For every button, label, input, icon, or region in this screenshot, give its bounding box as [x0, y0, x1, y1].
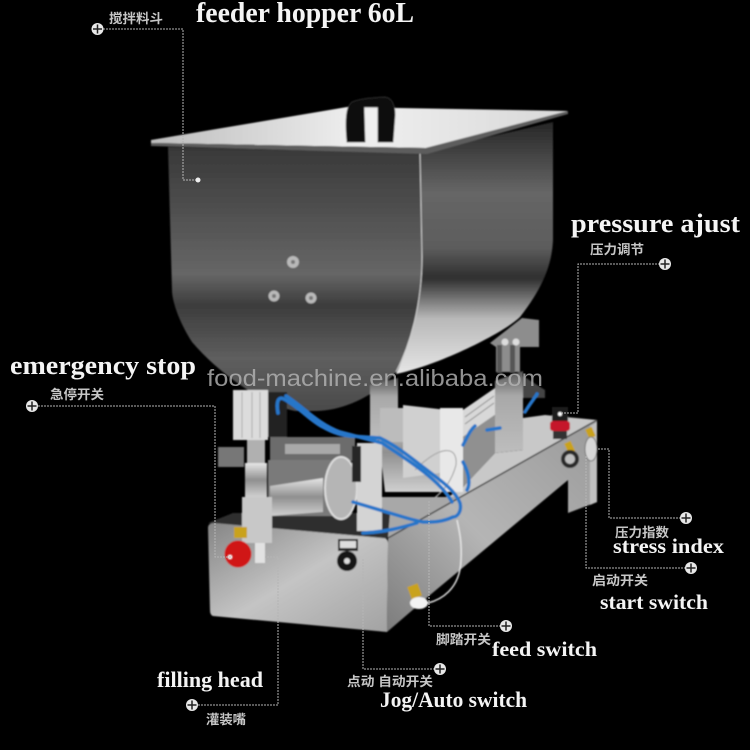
callout: jog auto switch: 点动 自动开关	[347, 674, 433, 689]
tray interior	[208, 415, 597, 538]
hopper bracket	[490, 318, 539, 373]
valve body	[268, 437, 382, 531]
callout: feed switch	[429, 500, 597, 661]
callout: jog auto switch: Jog/Auto switch	[380, 687, 527, 712]
side labels and switches	[561, 427, 597, 468]
callout: start switch: 启动开关	[592, 573, 648, 588]
callout: feed switch: 脚踏开关	[436, 632, 491, 647]
callout: pressure adjust: pressure ajust	[571, 209, 740, 238]
callout: feed switch: feed switch	[492, 637, 597, 661]
callout: feeder hopper	[92, 0, 414, 182]
hopper side face	[396, 122, 553, 374]
callout: start switch: start switch	[600, 590, 708, 614]
hopper lid handle	[346, 97, 395, 142]
hopper bolts	[268, 256, 316, 304]
callout: pressure adjust	[562, 209, 740, 413]
emergency stop button	[224, 540, 252, 568]
callout: start switch	[586, 455, 708, 614]
support plate right	[495, 371, 545, 453]
watermark: food-machine.en.alibaba.com	[207, 365, 543, 391]
blue air tubes	[277, 394, 537, 533]
callout: pressure adjust: 压力调节	[590, 242, 644, 257]
hopper front face	[168, 147, 422, 411]
callout: emergency stop: emergency stop	[10, 351, 196, 380]
callout: jog auto switch	[347, 558, 527, 712]
filling head	[218, 390, 287, 563]
support plate left	[370, 378, 398, 440]
callout: emergency stop	[10, 351, 231, 557]
front panel and base rail	[208, 420, 597, 632]
callout: stress index: stress index	[613, 534, 725, 558]
callout: emergency stop: 急停开关	[50, 387, 104, 402]
jog auto selector switch	[337, 539, 358, 571]
callout: filling head: 灌装嘴	[206, 712, 246, 727]
callout: stress index: 压力指数	[615, 525, 669, 540]
callout: filling head	[157, 557, 278, 727]
foot switch socket and air line	[407, 451, 461, 609]
callout: feeder hopper: 搅拌料斗	[109, 11, 163, 26]
main cylinder	[378, 388, 495, 492]
warning label	[234, 527, 247, 538]
machine illustration	[151, 97, 597, 632]
callout: filling head: filling head	[157, 667, 263, 692]
pressure regulator	[550, 407, 570, 439]
callout: stress index	[597, 449, 725, 558]
hopper lid	[151, 107, 568, 154]
